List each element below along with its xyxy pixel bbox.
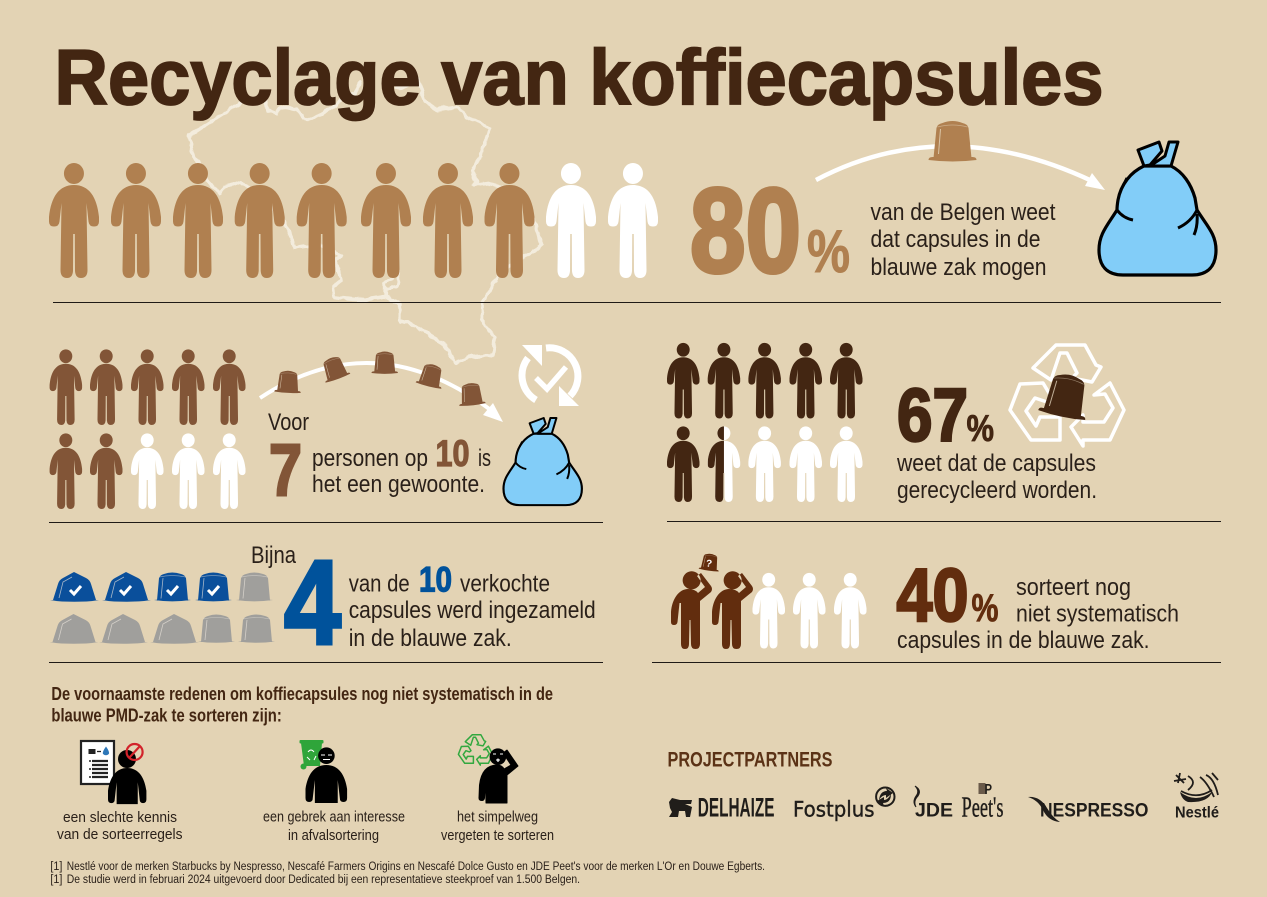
footnotes: [1] <box>50 874 62 886</box>
divider <box>667 521 1221 522</box>
text: van de Belgen weet: blauwe zak mogen <box>870 254 1046 281</box>
panel: 80% know capsules go in the blue bag <box>49 121 1216 298</box>
statistic: Bijna 4: Bijna <box>251 542 297 569</box>
title: Recyclage van koffiecapsules <box>54 33 1104 121</box>
labels: reason captions: van de sorteerregels <box>57 827 182 843</box>
divider <box>49 522 603 523</box>
text: Voor 7 personen op 10: 7 <box>269 430 302 511</box>
labels: reason captions <box>57 810 554 844</box>
labels: reason captions: een slechte kennis <box>63 810 177 826</box>
icon: recycle arrows with capsule <box>1010 345 1124 446</box>
icon: large capsule <box>928 121 976 162</box>
panel: 40% not yet systematic <box>671 552 1179 654</box>
heading: reasons: De voornaamste redenen om koffiecapsules nog niet systematisch in de <box>51 684 553 704</box>
text: van de 10 verkochte: van de <box>349 571 410 598</box>
statistic: 40%: % <box>972 587 998 630</box>
panel: reasons <box>51 684 554 844</box>
text: sorteert nog niet systematisch: sorteert nog <box>1016 574 1131 601</box>
icons: capsules along the arrow <box>274 352 486 407</box>
statistic: Bijna 4 <box>251 536 341 670</box>
footnotes: [1] <box>50 861 62 873</box>
text: weet dat de capsules <box>896 450 1097 504</box>
text: sorteert nog niet systematisch: niet systematisch <box>1016 601 1179 628</box>
text: Voor 7 personen op 10: het een gewoonte. <box>312 471 485 498</box>
icon: person with green bin <box>300 740 347 803</box>
text: sorteert nog niet systematisch <box>897 574 1179 654</box>
statistic: Bijna 4: 4 <box>284 536 341 670</box>
text: weet dat de capsules: gerecycleerd worden. <box>897 477 1097 504</box>
text: Voor 7 personen op 10: personen op <box>312 445 428 472</box>
text: van de 10 verkochte: 10 <box>419 561 452 600</box>
divider <box>53 302 1221 303</box>
text: van de Belgen weet: van de Belgen weet <box>870 199 1056 226</box>
icon: blue bag small <box>504 418 582 505</box>
panel: project partners <box>668 749 1219 824</box>
panel: 7 out of 10 habit <box>50 345 582 511</box>
text: Voor 7 personen op 10: is <box>478 445 491 472</box>
logo: JDE Peet's: Peet's <box>962 793 1004 824</box>
icon: blue bag <box>1099 142 1216 275</box>
pictogram: 4 of 10 people confused <box>671 571 866 649</box>
logo: Delhaize: DELHAIZE <box>698 793 774 823</box>
logo: Delhaize <box>669 793 774 823</box>
statistic: 40%: 40 <box>896 553 968 637</box>
pictogram: 8 of 10 people <box>49 163 658 278</box>
logo: Fost Plus: Fostplus <box>793 798 875 822</box>
labels: reason captions: het simpelweg <box>457 810 538 826</box>
text: Voor 7 personen op 10: 10 <box>436 433 470 474</box>
text: Voor 7 personen op 10 <box>268 409 491 511</box>
text: van de Belgen weet: dat capsules in de <box>870 226 1040 253</box>
divider <box>652 662 1221 663</box>
heading: reasons <box>51 684 553 726</box>
divider <box>49 662 603 663</box>
icon: person with sorting rules board <box>81 741 146 804</box>
statistic: 67%: 67 <box>897 373 968 457</box>
statistic: 80%: 80 <box>690 164 801 298</box>
statistic: 80%: % <box>807 218 850 285</box>
footnotes: De studie werd in februari 2024 uitgevoerd door Dedicated bij een representatieve steekproef van 1.500 Belgen. <box>67 874 580 886</box>
logo: JDE Peet's: JDE <box>915 801 953 822</box>
labels: reason captions: een gebrek aan interesse <box>263 810 405 826</box>
labels: reason captions: vergeten te sorteren <box>441 828 554 844</box>
text: van de 10 verkochte <box>349 561 596 652</box>
logo: Fost Plus <box>793 788 894 822</box>
text: sorteert nog niet systematisch: capsules in de blauwe zak. <box>897 627 1150 654</box>
logo: Nespresso: NESPRESSO <box>1040 801 1148 822</box>
heading: reasons: blauwe PMD-zak te sorteren zijn: <box>51 706 282 726</box>
logo: Nestle: Nestlé <box>1175 804 1219 821</box>
text: van de 10 verkochte: in de blauwe zak. <box>349 625 512 652</box>
panel: 67% know capsules are recycled <box>667 343 1124 504</box>
footnotes <box>50 861 765 886</box>
logo: Nestle <box>1174 773 1219 821</box>
icon: person forgetting with recycle symbol <box>458 735 518 803</box>
text: van de 10 verkochte: verkochte <box>460 571 550 598</box>
pictogram: ten capsules <box>50 572 275 644</box>
pictogram: 7 of 10 people <box>50 349 245 509</box>
arrow: curved arrow with capsules <box>260 363 503 422</box>
arrow: curved white arrow to bag <box>816 146 1105 190</box>
logo: JDE Peet's: P <box>984 781 992 798</box>
panel: nearly 4 of 10 collected <box>50 536 596 670</box>
map of Belgium outline <box>188 80 542 363</box>
footnotes: Nestlé voor de merken Starbucks by Nespresso, Nescafé Farmers Origins en Nescafé Dolce Gusto en JDE Peet's voor de merken L'Or en Douwe Egberts. <box>67 861 765 873</box>
icon: capsule with question mark <box>699 552 721 572</box>
labels: reason captions: in afvalsortering <box>288 828 379 844</box>
text: van de 10 verkochte: capsules werd ingezameld <box>349 597 596 624</box>
heading: projectpartners: PROJECTPARTNERS <box>668 749 832 772</box>
statistic: 67%: % <box>966 408 994 449</box>
icon: recurring check <box>522 345 579 406</box>
pictogram: 6.7 of 10 people <box>667 343 862 502</box>
text: van de Belgen weet <box>870 199 1056 281</box>
text: weet dat de capsules: weet dat de capsules <box>896 450 1096 477</box>
icon: capsule with question mark: ? <box>705 558 713 570</box>
logo: JDE Peet's <box>914 781 1004 824</box>
text: Voor 7 personen op 10: Voor <box>268 409 309 436</box>
